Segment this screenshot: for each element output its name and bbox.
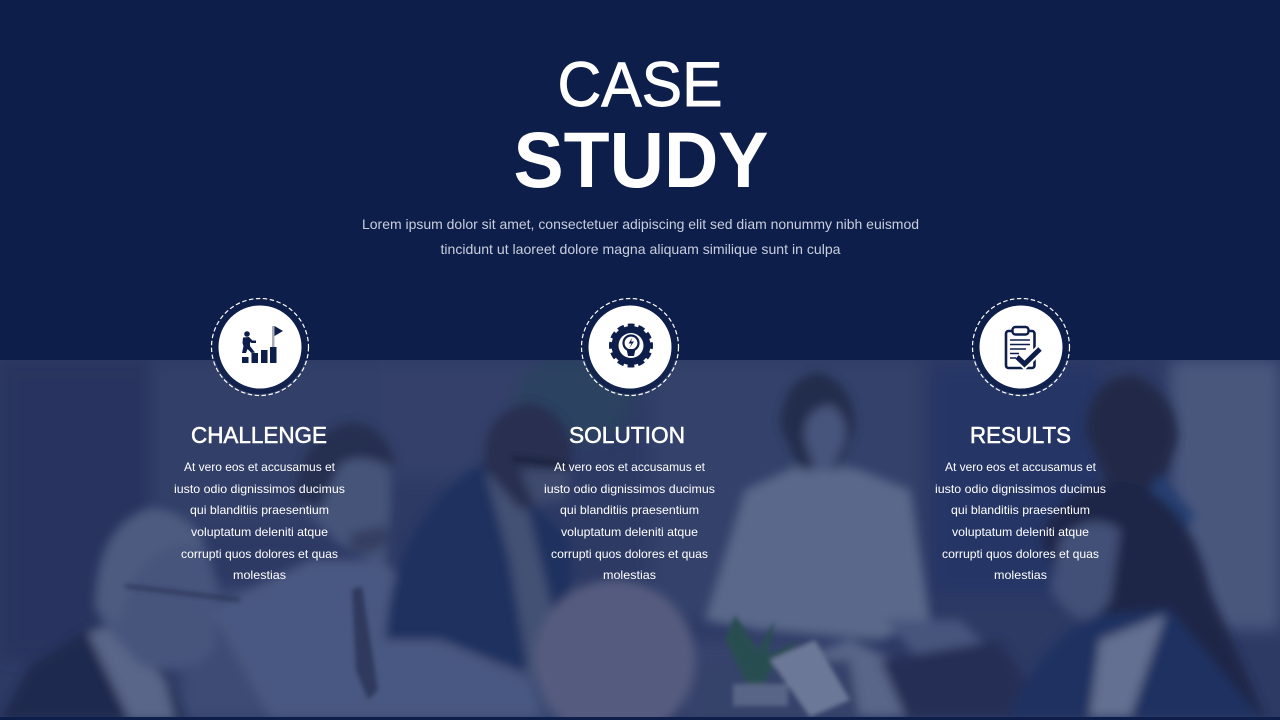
- body text: corrupti quos dolores et quas: [551, 547, 708, 561]
- heading: SOLUTION: [569, 422, 685, 448]
- heading: CHALLENGE: [191, 422, 327, 448]
- man centre shirt: [210, 560, 540, 717]
- intro text: Lorem ipsum dolor sit amet, consectetuer adipiscing elit sed diam nonummy nibh euismod: [362, 216, 919, 232]
- body text: qui blanditiis praesentium: [951, 503, 1090, 517]
- icon: challenge badge: [212, 298, 308, 396]
- body text: voluptatum deleniti atque: [952, 525, 1089, 539]
- intro text: [362, 216, 919, 257]
- icon: solution badge: [582, 298, 678, 396]
- body text: qui blanditiis praesentium: [190, 503, 329, 517]
- title: [514, 50, 768, 204]
- table objects and hands: [822, 638, 909, 717]
- body text: [935, 460, 1106, 582]
- paper: [770, 640, 850, 717]
- body text: voluptatum deleniti atque: [191, 525, 328, 539]
- heading: RESULTS: [970, 422, 1071, 448]
- man with glasses suit: [385, 460, 575, 670]
- body text: [544, 460, 715, 582]
- body text: iusto odio dignissimos ducimus: [544, 482, 715, 496]
- woman centre: [705, 460, 930, 640]
- panel: challenge: [174, 298, 345, 582]
- body text: corrupti quos dolores et quas: [942, 547, 1099, 561]
- body text: At vero eos et accusamus et: [184, 460, 336, 474]
- body text: molestias: [233, 568, 286, 582]
- body text: molestias: [994, 568, 1047, 582]
- body text: qui blanditiis praesentium: [560, 503, 699, 517]
- man left: [2, 634, 184, 717]
- right man: [1085, 375, 1178, 490]
- title: STUDY: [514, 115, 768, 204]
- photo: business meeting with navy overlay: [0, 355, 1280, 720]
- intro text: tincidunt ut laoreet dolore magna aliquam similique sunt in culpa: [440, 241, 841, 257]
- man centre head: [304, 455, 393, 562]
- body text: At vero eos et accusamus et: [945, 460, 1097, 474]
- panel: solution: [544, 298, 715, 582]
- plant: [725, 615, 796, 684]
- body text: corrupti quos dolores et quas: [181, 547, 338, 561]
- body text: iusto odio dignissimos ducimus: [935, 482, 1106, 496]
- blond head: [535, 580, 695, 720]
- body text: [174, 460, 345, 582]
- body text: iusto odio dignissimos ducimus: [174, 482, 345, 496]
- title: CASE: [558, 50, 722, 120]
- glasses: [125, 586, 240, 600]
- body text: molestias: [603, 568, 656, 582]
- tie: [352, 586, 378, 700]
- body text: voluptatum deleniti atque: [561, 525, 698, 539]
- right woman hair: [1040, 482, 1265, 717]
- icon: results badge: [972, 298, 1070, 396]
- panel: results: [935, 298, 1106, 582]
- body text: At vero eos et accusamus et: [554, 460, 706, 474]
